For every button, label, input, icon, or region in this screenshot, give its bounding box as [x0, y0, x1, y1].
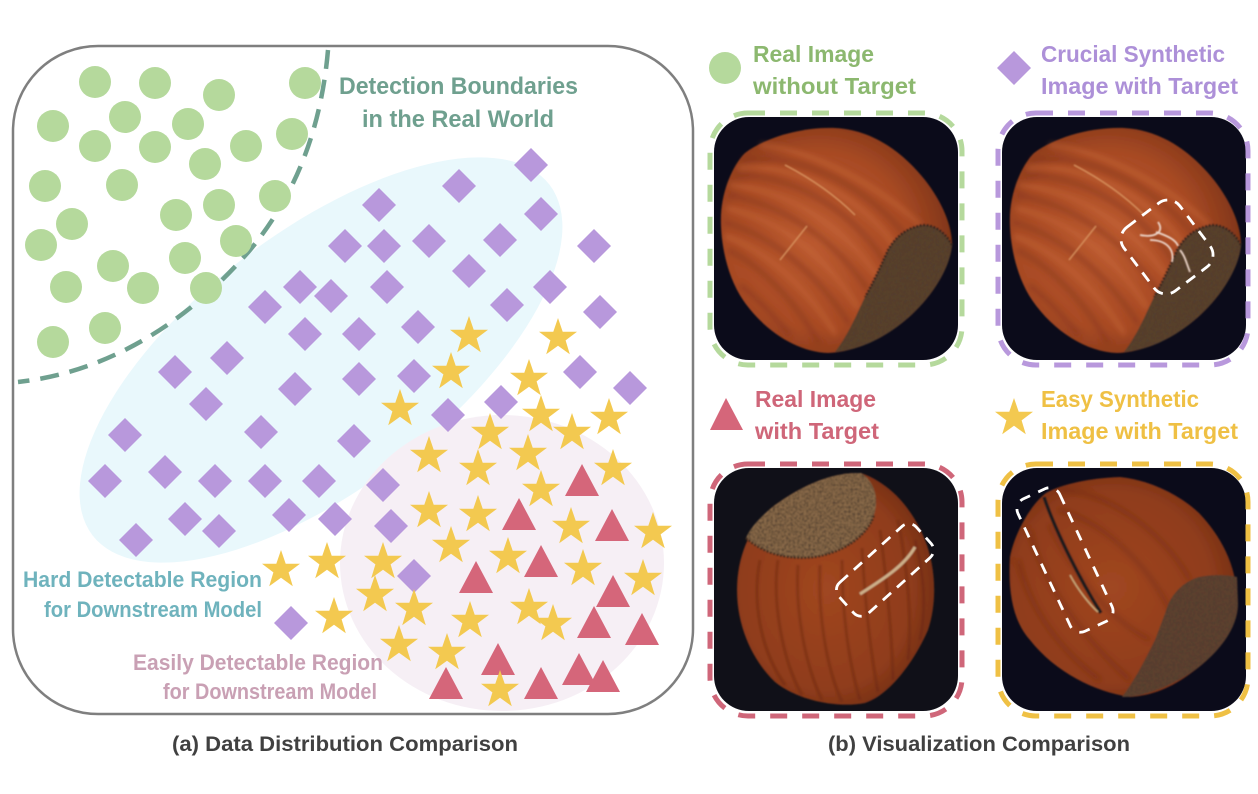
- label: easily detectable region: [133, 650, 383, 704]
- legend: easy synthetic image with target: Easy Synthetic: [1041, 386, 1199, 412]
- label: hard detectable region: for Downstream Model: [44, 597, 262, 622]
- legend: real image without target: without Target: [752, 73, 916, 99]
- legend: easy synthetic image with target: Image with Target: [1041, 418, 1238, 444]
- legend: real image with target: [710, 386, 879, 444]
- legend: crucial synthetic image with target: Crucial Synthetic: [1041, 41, 1225, 67]
- image panel: crucial synthetic hazelnut: [998, 113, 1248, 365]
- annotation: dashed defect box: [1115, 194, 1219, 300]
- legend: real image with target: with Target: [754, 418, 879, 444]
- image panel: real hazelnut with target: [710, 464, 962, 716]
- annotation: dashed defect box: [832, 520, 938, 620]
- legend: real image without target: Real Image: [753, 41, 874, 67]
- label: detection boundaries: in the Real World: [362, 106, 554, 133]
- region: hard detectable ellipse: [15, 83, 627, 637]
- label: easily detectable region: Easily Detectable Region: [133, 650, 383, 675]
- legend: easy synthetic image with target: [995, 386, 1238, 444]
- label: hard detectable region: Hard Detectable Region: [23, 567, 262, 592]
- image panel: real hazelnut without target: [710, 113, 962, 365]
- scatter: easy synthetic stars: [262, 316, 672, 706]
- panel: data distribution comparison: [13, 46, 693, 714]
- region: easily detectable circle: [340, 415, 664, 711]
- detection boundary dashed curve: [18, 50, 328, 382]
- label: detection boundaries: Detection Boundaries: [339, 73, 578, 100]
- scatter: real image with target triangles: [429, 464, 659, 699]
- legend: crucial synthetic image with target: [997, 41, 1238, 99]
- label: easily detectable region: for Downstream Model: [163, 679, 377, 704]
- caption: data distribution comparison: (a) Data Distribution Comparison: [172, 733, 518, 756]
- label: hard detectable region: [23, 567, 262, 622]
- scatter: real image without target circles: [25, 66, 321, 358]
- legend: crucial synthetic image with target: Image with Target: [1041, 73, 1238, 99]
- label: detection boundaries: [339, 73, 578, 133]
- legend: real image without target: [709, 41, 916, 99]
- panel frame: [13, 46, 693, 714]
- legend: real image with target: Real Image: [755, 386, 876, 412]
- scatter: crucial synthetic diamonds: [88, 148, 647, 640]
- caption: visualization comparison: (b) Visualization Comparison: [828, 733, 1130, 756]
- annotation: dashed defect box: [1013, 484, 1117, 636]
- image panel: easy synthetic hazelnut: [998, 464, 1248, 716]
